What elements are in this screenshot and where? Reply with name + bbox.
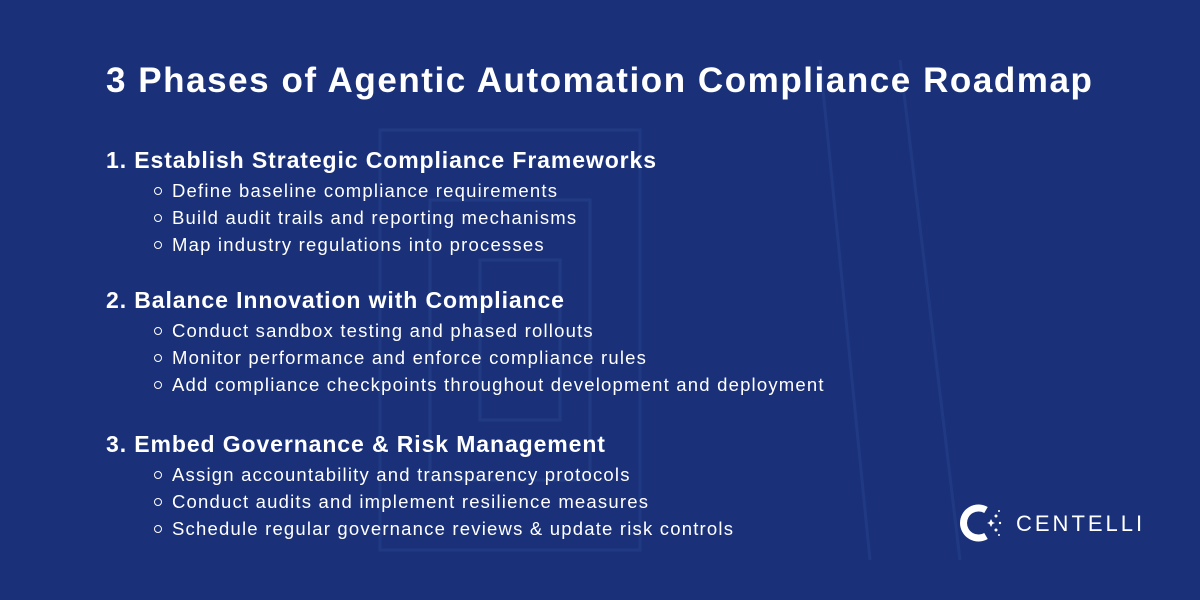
section 2: 2. Balance Innovation with Compliance — [106, 287, 565, 313]
section 2: Conduct sandbox testing and phased rollouts — [172, 320, 594, 341]
section 3: Schedule regular governance reviews & update risk controls — [172, 518, 734, 539]
title: 3 Phases of Agentic Automation Compliance Roadmap — [106, 61, 1093, 100]
logo: CENTELLI — [1016, 511, 1145, 536]
section 1: Build audit trails and reporting mechanisms — [172, 207, 577, 228]
logo — [960, 504, 1145, 542]
section 1: 1. Establish Strategic Compliance Frameworks — [106, 147, 657, 173]
section 3: Conduct audits and implement resilience measures — [172, 491, 649, 512]
section 2 — [106, 287, 825, 395]
section 3: 3. Embed Governance & Risk Management — [106, 431, 606, 457]
section 1: Define baseline compliance requirements — [172, 180, 558, 201]
section 3: Assign accountability and transparency protocols — [172, 464, 631, 485]
section 1 — [106, 147, 657, 255]
section 2: Monitor performance and enforce compliance rules — [172, 347, 647, 368]
section 3 — [106, 431, 734, 539]
section 1: Map industry regulations into processes — [172, 234, 545, 255]
section 2: Add compliance checkpoints throughout development and deployment — [172, 374, 825, 395]
